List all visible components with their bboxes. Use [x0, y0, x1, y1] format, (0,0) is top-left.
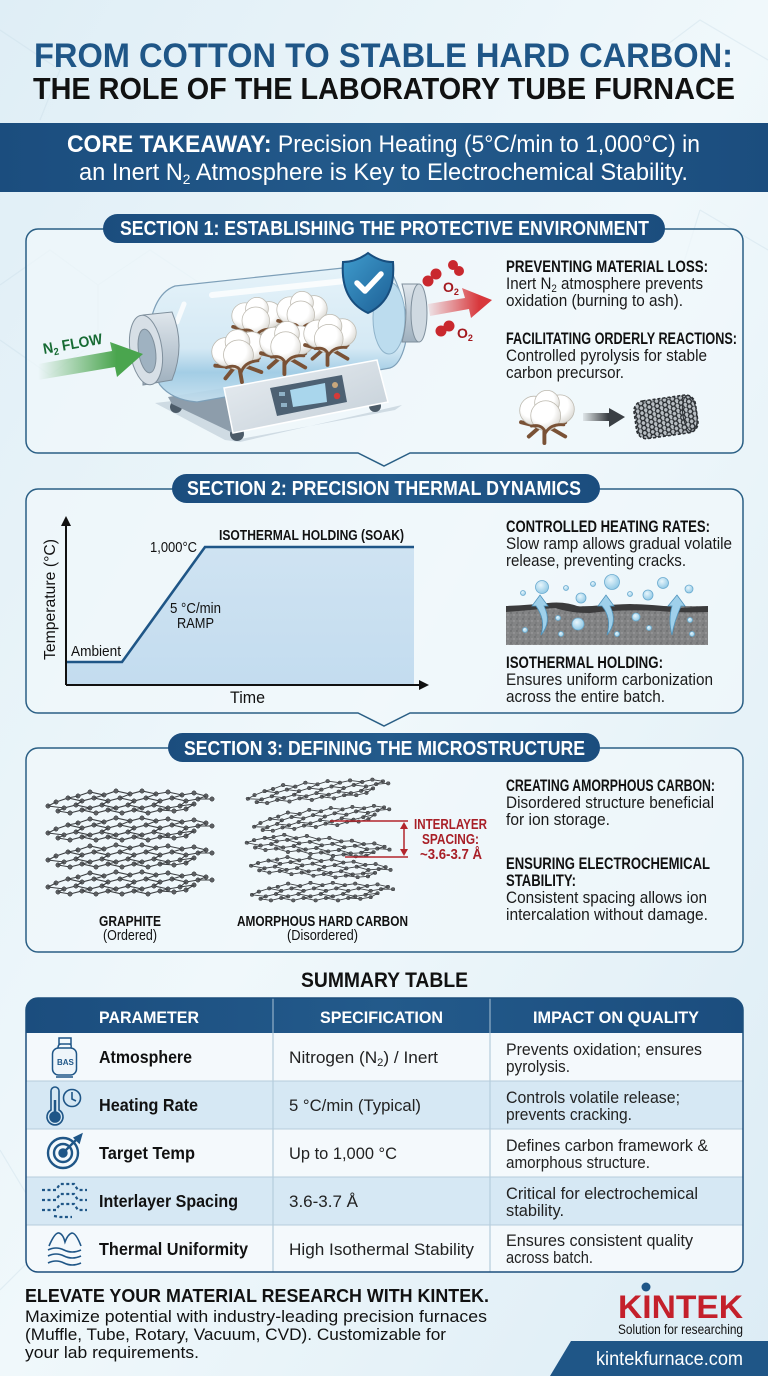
core takeaway banner: an Inert N: [79, 159, 184, 186]
text: ensuring electrochemical stability: [506, 855, 710, 924]
table header: IMPACT ON QUALITY: [533, 1008, 700, 1027]
arrow: oxygen out: O: [457, 325, 468, 341]
row: heating rate: prevents cracking.: [506, 1105, 632, 1124]
text: isothermal holding: ISOTHERMAL HOLDING:: [506, 654, 663, 672]
text: preventing material loss: 2: [551, 283, 557, 295]
section 3 heading: SECTION 3: DEFINING THE MICROSTRUCTURE: [184, 738, 585, 760]
row: heating rate: Heating Rate: [99, 1095, 198, 1115]
row: heating rate: [47, 1087, 680, 1125]
footer website band: kintekfurnace.com: [596, 1349, 743, 1370]
chart: temperature profile: RAMP: [177, 615, 214, 632]
row: interlayer spacing: [42, 1184, 698, 1220]
row: atmosphere: Prevents oxidation; ensures: [506, 1040, 702, 1059]
diagram: graphite layers: (Ordered): [103, 928, 157, 944]
text: preventing material loss: [506, 258, 708, 310]
arrow: N2 flow: 2: [53, 346, 60, 358]
row: target temp: Defines carbon framework &: [506, 1136, 709, 1155]
row: atmosphere: Nitrogen (N: [289, 1048, 376, 1067]
row: heating rate: 5 °C/min (Typical): [289, 1096, 421, 1115]
icon: thermometer and clock: [47, 1087, 80, 1125]
callout: interlayer spacing: SPACING:: [422, 832, 479, 848]
text: preventing material loss: atmosphere prevents: [557, 274, 703, 293]
diagram: graphite layers: [48, 791, 212, 944]
arrow: oxygen out: 2: [468, 333, 473, 343]
row: thermal uniformity: [48, 1231, 693, 1267]
summary table: [26, 998, 743, 1272]
arrow: N2 flow: [38, 331, 143, 380]
icon: lattice layers: [42, 1184, 87, 1217]
icon: volatile release bubbles: [506, 574, 708, 645]
text: ensuring electrochemical stability: intercalation without damage.: [506, 905, 708, 924]
chart: temperature profile: Time: [230, 689, 265, 707]
section 3 heading: [168, 733, 600, 762]
text: ensuring electrochemical stability: STABILITY:: [506, 872, 576, 890]
icon: gas cylinder: [52, 1038, 76, 1077]
footer call to action: [25, 1285, 489, 1362]
diagram: graphite layers: GRAPHITE: [99, 914, 161, 930]
title: THE ROLE OF THE LABORATORY TUBE FURNACE: [33, 71, 735, 106]
row: interlayer spacing: stability.: [506, 1201, 564, 1220]
row: target temp: [48, 1135, 709, 1172]
logo: KINTEK: KINTEK: [618, 1289, 743, 1325]
arrow: oxygen out: 2: [454, 287, 459, 297]
arrow: oxygen out: [422, 260, 492, 343]
panel: section 3: [26, 733, 743, 952]
text: controlled heating rates: [506, 518, 732, 570]
arrow: N2 flow: N: [42, 339, 55, 358]
chart: temperature profile: Temperature (°C): [42, 539, 59, 660]
chart: temperature profile: 1,000°C: [150, 539, 197, 556]
icon: heat waves: [48, 1233, 81, 1265]
row: heating rate: Controls volatile release;: [506, 1088, 680, 1107]
title: FROM COTTON TO STABLE HARD CARBON:: [34, 37, 733, 75]
text: facilitating orderly reactions: Controlled pyrolysis for stable: [506, 346, 707, 365]
arrow: oxygen out: O: [443, 279, 454, 295]
footer call to action: your lab requirements.: [25, 1343, 199, 1362]
text: creating amorphous carbon: [506, 777, 715, 829]
row: atmosphere: [52, 1038, 702, 1077]
row: thermal uniformity: across batch.: [506, 1248, 593, 1267]
table header: [26, 998, 743, 1033]
diagram: amorphous hard carbon layers: (Disordered): [287, 928, 358, 944]
footer website band: [550, 1341, 768, 1376]
text: controlled heating rates: CONTROLLED HEATING RATES:: [506, 518, 710, 536]
heading: summary table: SUMMARY TABLE: [301, 969, 468, 992]
title: [33, 37, 735, 106]
footer call to action: (Muffle, Tube, Rotary, Vacuum, CVD). Customizable for: [25, 1325, 446, 1344]
row: interlayer spacing: Critical for electrochemical: [506, 1184, 698, 1203]
icon: cotton to carbon nanotube: [520, 390, 699, 443]
callout: interlayer spacing: ~3.6-3.7 Å: [420, 846, 482, 863]
text: isothermal holding: [506, 654, 713, 706]
row: atmosphere: 2: [377, 1057, 383, 1069]
row: target temp: Up to 1,000 °C: [289, 1144, 397, 1163]
text: isothermal holding: across the entire batch.: [506, 687, 665, 706]
footer call to action: ELEVATE YOUR MATERIAL RESEARCH WITH KINTEK.: [25, 1285, 489, 1306]
section 1 heading: [103, 214, 665, 243]
section 2 heading: SECTION 2: PRECISION THERMAL DYNAMICS: [187, 478, 581, 500]
row: atmosphere: pyrolysis.: [506, 1057, 570, 1076]
core takeaway banner: 2: [183, 171, 191, 187]
row: target temp: amorphous structure.: [506, 1153, 650, 1172]
core takeaway banner: Atmosphere is Key to Electrochemical Stability.: [190, 159, 688, 186]
row: atmosphere: ) / Inert: [383, 1048, 438, 1067]
text: isothermal holding: Ensures uniform carbonization: [506, 670, 713, 689]
text: ensuring electrochemical stability: Consistent spacing allows ion: [506, 888, 707, 907]
table header: SPECIFICATION: [320, 1008, 443, 1027]
callout: interlayer spacing: [330, 817, 487, 863]
row: atmosphere: Atmosphere: [99, 1047, 192, 1067]
core takeaway banner: [0, 123, 768, 192]
chart: temperature profile: [42, 516, 429, 707]
core takeaway banner: CORE TAKEAWAY: Precision Heating (5°C/min to 1,000°C) in: [67, 131, 700, 158]
chart: temperature profile: Ambient: [71, 643, 122, 660]
panel: section 1: [26, 214, 743, 466]
row: target temp: Target Temp: [99, 1143, 195, 1163]
icon: target: [48, 1135, 81, 1168]
logo: KINTEK: Solution for researching: [618, 1322, 743, 1337]
arrow: N2 flow: FLOW: [57, 331, 105, 355]
logo: KINTEK: [618, 1282, 743, 1337]
icon: gas cylinder: BAS: [57, 1058, 75, 1067]
callout: interlayer spacing: INTERLAYER: [414, 817, 487, 833]
panel: section 2: [26, 474, 743, 726]
row: thermal uniformity: Ensures consistent quality: [506, 1231, 693, 1250]
text: preventing material loss: oxidation (burning to ash).: [506, 291, 683, 310]
text: creating amorphous carbon: Disordered structure beneficial: [506, 793, 714, 812]
text: facilitating orderly reactions: [506, 330, 737, 382]
row: interlayer spacing: 3.6-3.7 Å: [289, 1192, 359, 1211]
chart: temperature profile: 5 °C/min: [170, 600, 221, 617]
section 2 heading: [172, 474, 600, 503]
row: interlayer spacing: Interlayer Spacing: [99, 1191, 238, 1211]
diagram: amorphous hard carbon layers: [237, 777, 408, 944]
icon: shield with check: [343, 253, 393, 313]
text: preventing material loss: PREVENTING MATERIAL LOSS:: [506, 258, 708, 276]
icon: tube furnace with cotton: [125, 268, 427, 442]
chart: temperature profile: ISOTHERMAL HOLDING (SOAK): [219, 528, 404, 544]
text: controlled heating rates: release, preventing cracks.: [506, 551, 686, 570]
text: ensuring electrochemical stability: ENSURING ELECTROCHEMICAL: [506, 855, 710, 873]
text: creating amorphous carbon: for ion storage.: [506, 810, 610, 829]
text: preventing material loss: Inert N: [506, 274, 557, 293]
footer call to action: Maximize potential with industry-leading precision furnaces: [25, 1307, 487, 1326]
text: facilitating orderly reactions: carbon precursor.: [506, 363, 624, 382]
table header: PARAMETER: [99, 1008, 199, 1027]
row: thermal uniformity: High Isothermal Stability: [289, 1240, 474, 1259]
section 1 heading: SECTION 1: ESTABLISHING THE PROTECTIVE ENVIRONMENT: [120, 218, 649, 240]
diagram: amorphous hard carbon layers: AMORPHOUS HARD CARBON: [237, 914, 408, 930]
row: thermal uniformity: Thermal Uniformity: [99, 1239, 248, 1259]
text: controlled heating rates: Slow ramp allows gradual volatile: [506, 534, 732, 553]
